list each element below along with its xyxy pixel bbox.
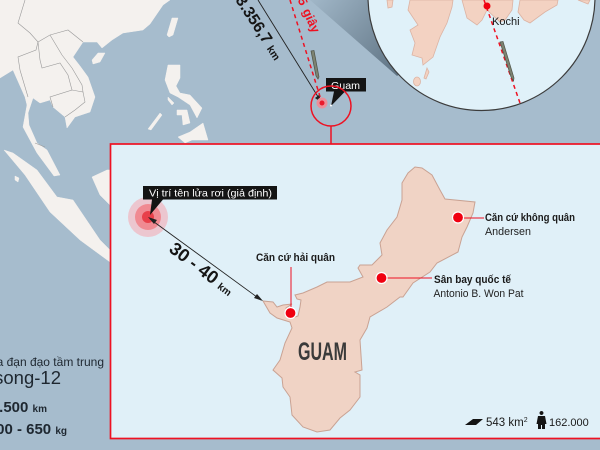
inset circle: Kochi map [368, 0, 595, 110]
airport [376, 272, 524, 300]
panel: Guam detail map [110, 144, 600, 438]
flight path to Guam [290, 0, 322, 103]
Guam target marker [316, 98, 328, 108]
Guam island [263, 167, 475, 432]
air force base: Andersen [485, 226, 531, 238]
Guam callout: Guam [331, 80, 360, 92]
inset missile [500, 42, 514, 81]
area stat: 2 [524, 417, 528, 424]
air force base [452, 212, 575, 238]
impact callout: Vị trí tên lửa rơi (giả định) [149, 188, 272, 200]
Kochi label: Kochi [492, 16, 520, 28]
population stat: 162.000 [549, 417, 589, 429]
regional map: Southeast Asia landmasses [0, 0, 208, 262]
Kochi marker [484, 2, 490, 10]
missile specifications [0, 355, 104, 438]
missile [311, 50, 319, 79]
impact marker [128, 197, 168, 237]
shadow cone to inset [310, 0, 420, 76]
airport: Sân bay quốc tế [434, 274, 512, 286]
Guam callout [326, 78, 366, 106]
connector [330, 126, 332, 144]
impact callout [143, 186, 277, 215]
air force base: Căn cứ không quân [485, 212, 575, 224]
country borders [18, 0, 85, 147]
inset flight path [484, 0, 520, 103]
area stat [465, 417, 528, 429]
Guam locator circle [311, 86, 351, 126]
distance arrow [148, 217, 263, 301]
distance line [258, 0, 320, 100]
population stat [536, 411, 589, 429]
inset land [387, 0, 590, 86]
distance label 30-40 km: 30 - 40 km [166, 238, 238, 300]
area stat: 543 km [486, 417, 524, 429]
naval base: Căn cứ hải quân [256, 252, 335, 264]
airport: Antonio B. Won Pat [434, 288, 524, 300]
GUAM label: GUAM [298, 338, 347, 366]
naval base [256, 252, 335, 318]
